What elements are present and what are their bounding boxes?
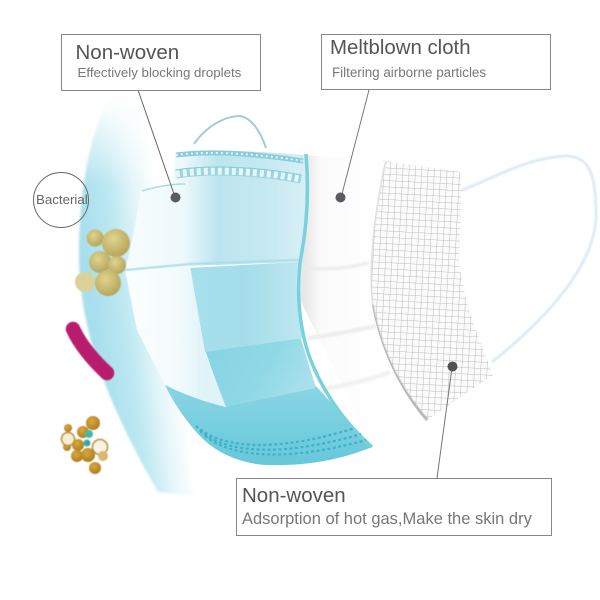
label box: meltblown cloth: Meltblown cloth (330, 37, 471, 59)
bacteria: magenta rod (73, 329, 107, 373)
label box: meltblown cloth: Filtering airborne particles (332, 65, 486, 80)
bacteria: golden cluster with teal core (62, 416, 108, 474)
label box: outer non-woven (62, 34, 260, 90)
ear loop: top (194, 116, 266, 148)
callout: Bacterial (34, 172, 88, 228)
top panel (125, 151, 307, 270)
label box: inner non-woven (236, 478, 552, 536)
label box: inner non-woven: Adsorption of hot gas,Make the skin dry (242, 510, 533, 528)
teal edge (299, 154, 372, 447)
bottom stitching (196, 426, 366, 455)
bacteria: yellow cluster (75, 229, 130, 296)
fold line (142, 184, 185, 191)
pleat shadow (125, 260, 298, 270)
bottom panel (165, 385, 372, 465)
second pleat: blue (188, 262, 303, 352)
label box: meltblown cloth (322, 34, 550, 90)
leader line: non-woven outer (138, 90, 180, 202)
ear loop: right (460, 156, 596, 362)
callout: Bacterial: Bacterial (36, 192, 88, 207)
leader line: meltblown (336, 90, 369, 202)
third pleat: white (137, 330, 226, 407)
label box: outer non-woven: Effectively blocking droplets (78, 65, 242, 80)
outer blue mask (125, 151, 372, 465)
top stitching (176, 153, 303, 179)
leader line: non-woven inner (437, 362, 458, 478)
inner layer: textured non-woven (370, 160, 493, 422)
third pleat: blue (205, 336, 316, 407)
middle layer: meltblown cloth (300, 155, 425, 445)
face shield: curved blue backdrop (70, 90, 240, 500)
second pleat: white (125, 266, 205, 352)
label box: outer non-woven: Non-woven (76, 41, 179, 64)
label box: inner non-woven: Non-woven (242, 484, 346, 507)
